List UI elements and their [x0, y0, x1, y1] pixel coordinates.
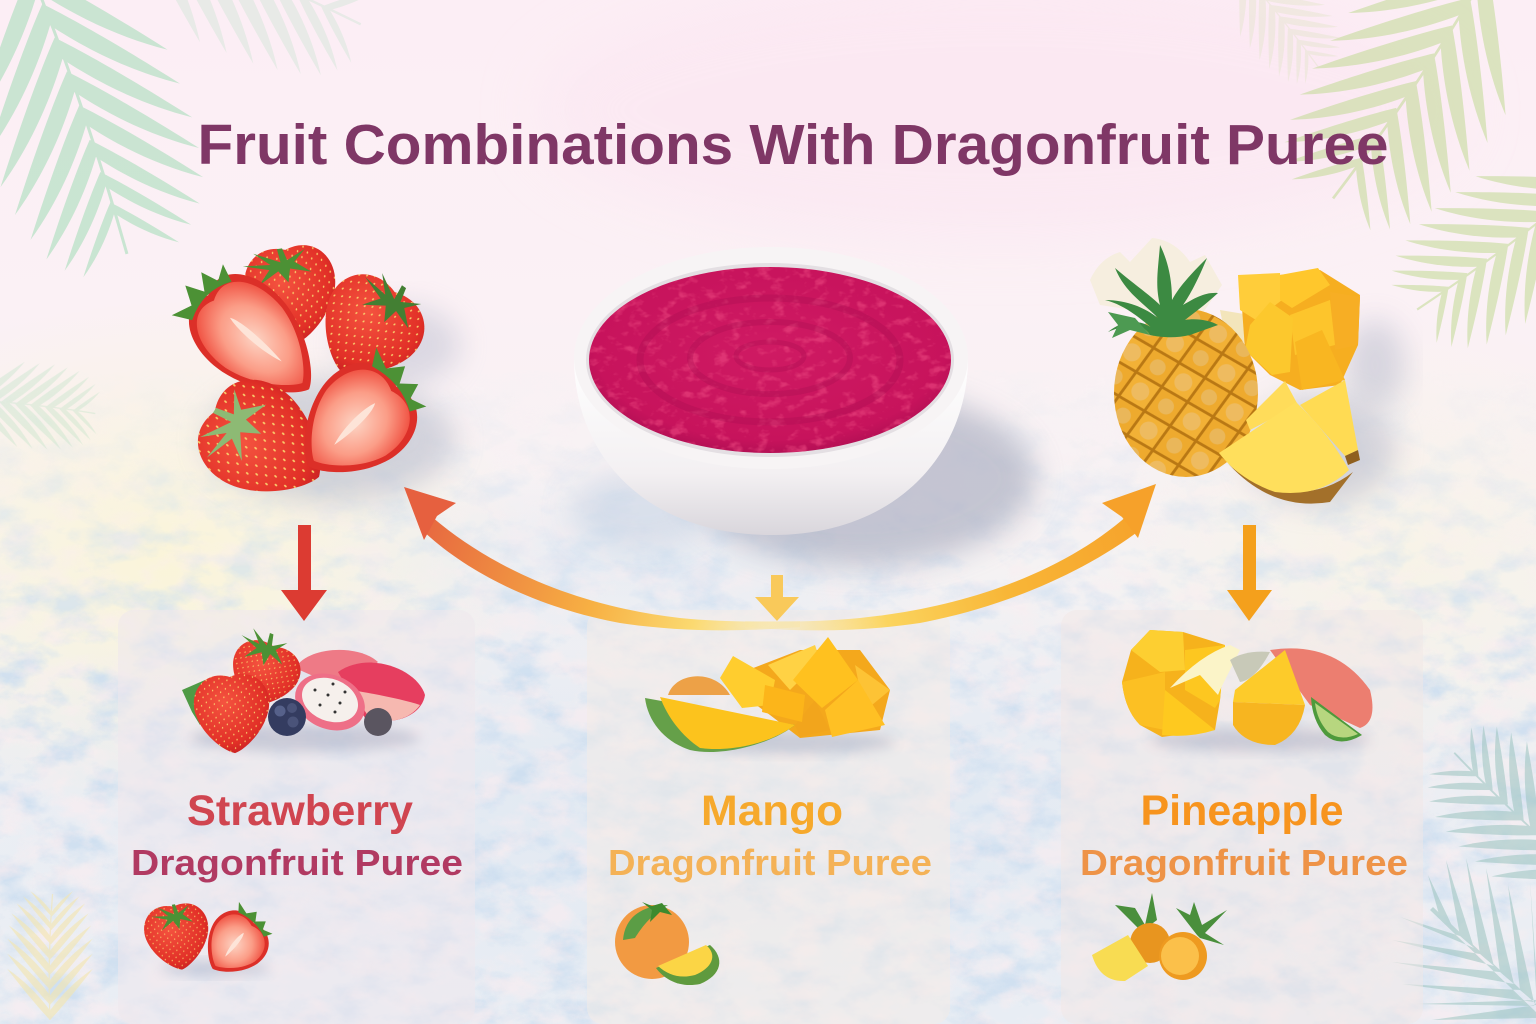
label: pineapple — [1080, 787, 1408, 883]
strawberries group — [159, 241, 460, 523]
arrow: down to pineapple panel — [1227, 525, 1272, 621]
label: strawberry — [131, 787, 463, 883]
palm leaves: bottom left — [7, 891, 93, 1020]
arrow: down to strawberry panel — [281, 525, 327, 621]
palm leaves: top right — [1239, 0, 1536, 348]
small icon: strawberries — [141, 895, 283, 989]
label: pineapple: Dragonfruit Puree — [1080, 842, 1408, 883]
label: strawberry: Strawberry — [187, 787, 413, 835]
label: pineapple: Pineapple — [1140, 787, 1344, 835]
arrow: bowl to strawberries — [404, 487, 800, 630]
panel: mango — [587, 610, 950, 1024]
panel: pineapple — [1061, 610, 1423, 1024]
arrow: down to mango panel — [755, 575, 799, 621]
pineapple and mango cubes group — [1090, 238, 1405, 505]
strawberry blend illustration — [182, 624, 425, 756]
palm leaves: bottom right — [1392, 706, 1536, 1020]
label: mango: Mango — [701, 787, 843, 835]
label: mango — [608, 787, 932, 883]
pineapple blend illustration — [1122, 630, 1372, 752]
small icon: mango and orange — [615, 902, 719, 985]
arrow: bowl to pineapple — [745, 484, 1156, 630]
label: strawberry: Dragonfruit Puree — [131, 842, 463, 883]
mango blend illustration — [645, 637, 895, 754]
label: mango: Dragonfruit Puree — [608, 842, 932, 883]
small icon: citrus — [1092, 893, 1227, 981]
centre bowl of dragonfruit puree — [570, 247, 1035, 566]
title: Fruit Combinations With Dragonfruit Puree — [198, 113, 1388, 177]
background wash — [0, 388, 1536, 1024]
palm leaves: top left — [0, 0, 361, 449]
panel: strawberry — [118, 610, 475, 1024]
